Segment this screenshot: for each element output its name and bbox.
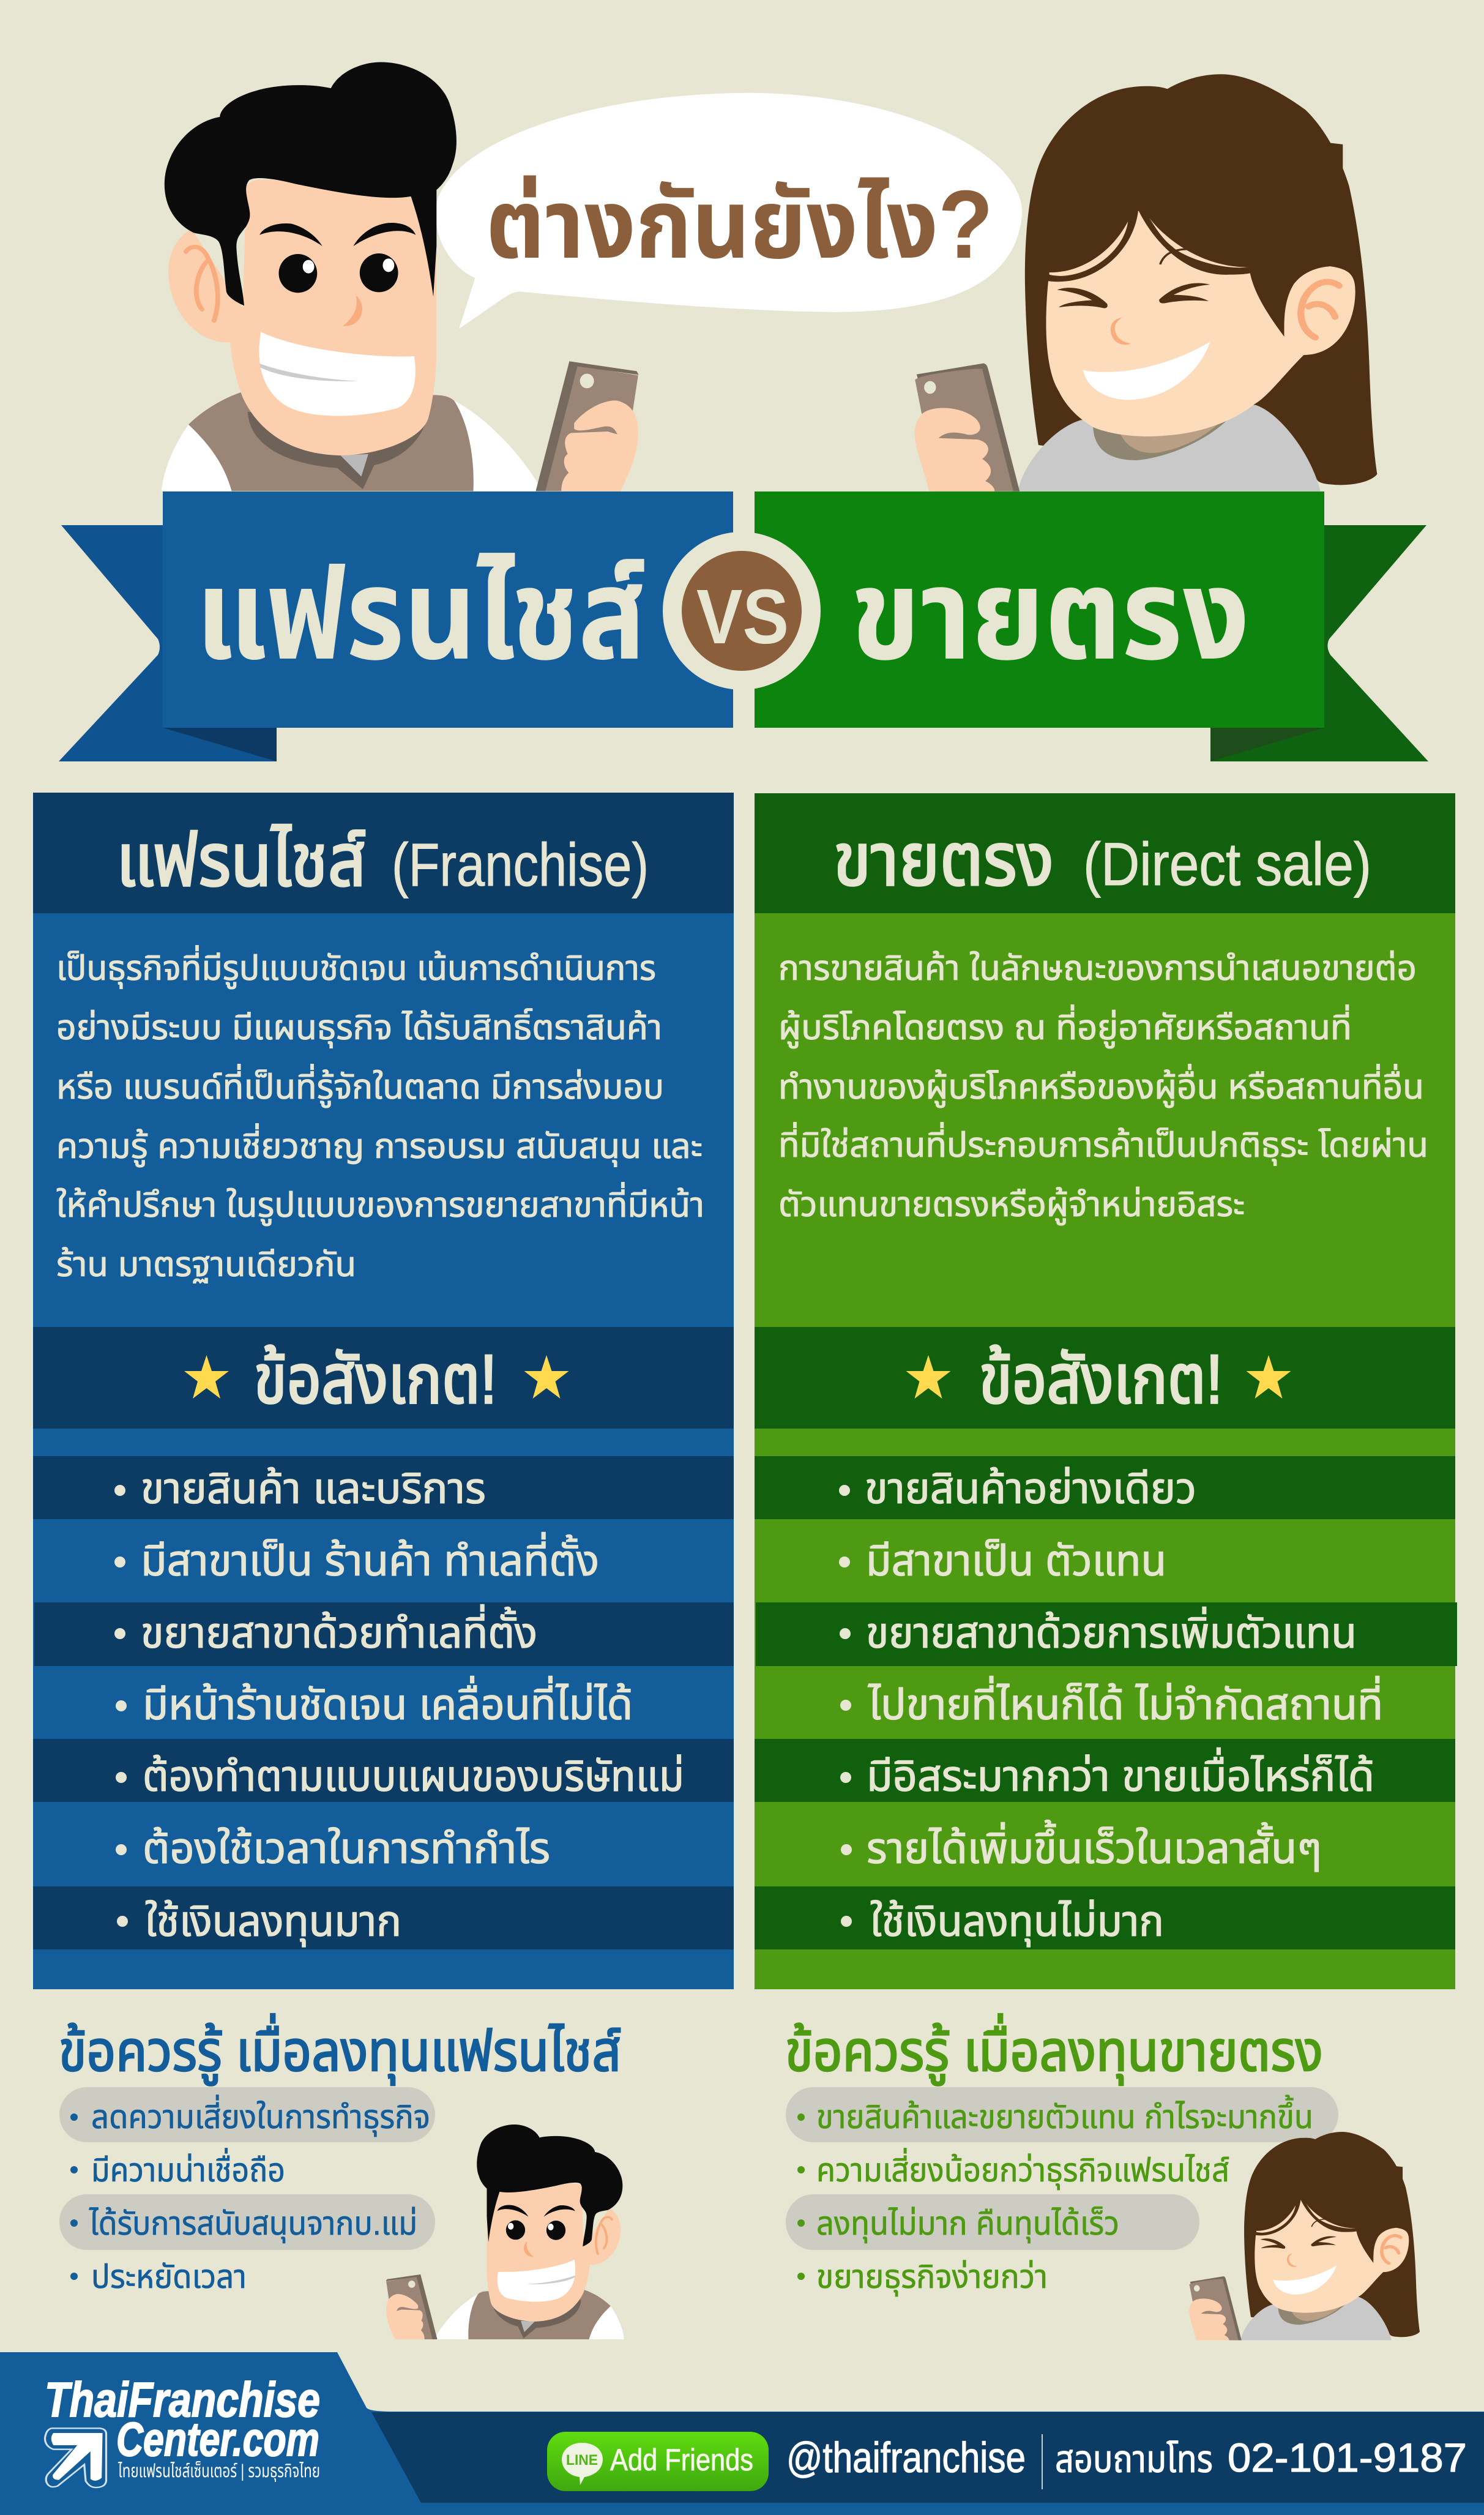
notes list: franchise (33, 1456, 734, 1949)
button: LINE add friends: LINE (566, 2452, 598, 2468)
bullets (70, 2113, 78, 2280)
list items: ลงทุนไม่มาก คืนทุนได้เร็ว (816, 2205, 1119, 2243)
list items (89, 2095, 430, 2295)
notes heading: direct sale: ข้อสังเกต! (979, 1341, 1223, 1418)
direct sale description text: ผู้บริโภคโดยตรง ณ ที่อยู่อาศัยหรือสถานที่ (778, 1004, 1352, 1048)
heading: franchise investing: ข้อควรรู้ เมื่อลงทุนแฟรนไชส์ (59, 2014, 621, 2085)
franchise description text (56, 945, 704, 1284)
button: LINE add friends (547, 2432, 769, 2491)
logo: ThaiFranchise Center: ไทยแฟรนไชส์เซ็นเตอร์ | รวมธุรกิจไทย (117, 2461, 320, 2482)
contact: line id and phone: สอบถามโทร (1055, 2438, 1213, 2481)
notes list: franchise: ขยายสาขาด้วยทำเลที่ตั้ง (141, 1604, 537, 1657)
banner ribbon tail: left (59, 525, 277, 761)
notes list: franchise: ใช้เงินลงทุนมาก (145, 1897, 401, 1947)
notes list: direct sale: ใช้เงินลงทุนไม่มาก (870, 1897, 1164, 1947)
notes list: direct sale: รายได้เพิ่มขึ้นเร็วในเวลาสั้นๆ (867, 1820, 1322, 1872)
franchise description text: ความรู้ ความเชี่ยวชาญ การอบรม สนับสนุน และ (56, 1123, 703, 1167)
panel heading: franchise: แฟรนไชส์ (116, 820, 366, 902)
illustration: small woman (1189, 2132, 1420, 2340)
direct sale description text: ตัวแทนขายตรงหรือผู้จำหน่ายอิสระ (778, 1185, 1245, 1225)
direct sale description text: การขายสินค้า ในลักษณะของการนำเสนอขายต่อ (778, 949, 1417, 987)
direct sale description text (778, 949, 1428, 1225)
illustration: man with phone (162, 62, 639, 491)
notes list: franchise: ต้องทำตามแบบแผนของบริษัทแม่ (143, 1752, 684, 1800)
banner: franchise title: แฟรนไชส์ (196, 544, 646, 686)
panel heading: franchise (33, 793, 734, 913)
notes list: franchise: ต้องใช้เวลาในการทำกำไร (143, 1825, 550, 1872)
list items (816, 2095, 1313, 2296)
list items: ขายสินค้าและขยายตัวแทน กำไรจะมากขึ้น (816, 2095, 1313, 2136)
speech bubble with question: ต่างกันยังไง? (486, 171, 993, 278)
panel: franchise (33, 793, 734, 1989)
section: things to know, direct sale (785, 2014, 1338, 2296)
logo icon: arrow (45, 2428, 106, 2487)
heading: direct sale investing: ข้อควรรู้ เมื่อลงทุนขายตรง (785, 2014, 1323, 2085)
notes list: franchise: มีสาขาเป็น ร้านค้า ทำเลที่ตั้ง (141, 1532, 599, 1585)
contact: line id and phone: 02-101-9187 (1228, 2435, 1467, 2480)
notes list: direct sale: มีสาขาเป็น ตัวแทน (866, 1537, 1166, 1585)
panel: direct sale (755, 793, 1457, 1989)
panel heading: direct sale (755, 793, 1455, 913)
notes heading: franchise: ข้อสังเกต! (254, 1341, 497, 1418)
notes list: direct sale: ไปขายที่ไหนก็ได้ ไม่จำกัดสถานที่ (868, 1676, 1383, 1728)
footer bar (0, 2352, 1484, 2515)
highlight pills (59, 2087, 435, 2250)
panel heading: franchise: (Franchise) (392, 831, 649, 899)
banner: direct sale title (755, 491, 1324, 728)
notes heading: direct sale (755, 1327, 1455, 1429)
bullets (797, 2113, 805, 2280)
list items: ความเสี่ยงน้อยกว่าธุรกิจแฟรนไชส์ (816, 2148, 1229, 2190)
notes list: direct sale: มีอิสระมากกว่า ขายเมื่อไหร่ก็ได้ (867, 1747, 1374, 1800)
list items: ได้รับการสนับสนุนจากบ.แม่ (89, 2205, 417, 2243)
direct sale description text: ที่มิใช่สถานที่ประกอบการค้าเป็นปกติธุระ โดยผ่าน (778, 1122, 1428, 1165)
direct sale description text: ทำงานของผู้บริโภคหรือของผู้อื่น หรือสถานที่อื่น (778, 1064, 1424, 1108)
list items: ประหยัดเวลา (91, 2259, 247, 2295)
banner ribbon tail: right (1210, 525, 1428, 761)
franchise description text: อย่างมีระบบ มีแผนธุรกิจ ได้รับสิทธิ์ตราสินค้า (56, 1008, 662, 1048)
notes heading: franchise (33, 1327, 734, 1429)
notes list: direct sale: ขายสินค้าอย่างเดียว (865, 1465, 1196, 1512)
button: LINE add friends: Add Friends (610, 2443, 753, 2477)
franchise description text: เป็นธุรกิจที่มีรูปแบบชัดเจน เน้นการดำเนินการ (56, 945, 656, 989)
notes list: franchise: ขายสินค้า และบริการ (141, 1465, 486, 1512)
notes list: franchise: มีหน้าร้านชัดเจน เคลื่อนที่ไม่ได้ (143, 1676, 633, 1728)
section: things to know, franchise (59, 2014, 621, 2295)
logo: ThaiFranchise Center: Center.com (116, 2412, 319, 2466)
contact: line id and phone: @thaifranchise (786, 2434, 1026, 2481)
banner: franchise title (163, 491, 733, 728)
franchise description text: หรือ แบรนด์ที่เป็นที่รู้จักในตลาด มีการส่งมอบ (56, 1064, 664, 1108)
logo: ThaiFranchise Center: ThaiFranchise (45, 2372, 320, 2427)
notes list: direct sale: ขยายสาขาด้วยการเพิ่มตัวแทน (866, 1607, 1357, 1657)
speech bubble with question (435, 93, 1022, 329)
panel heading: direct sale: ขายตรง (833, 819, 1054, 901)
VS badge: VS (696, 574, 789, 660)
franchise description text: ร้าน มาตรฐานเดียวกัน (56, 1245, 356, 1284)
logo: ThaiFranchise Center (45, 2372, 320, 2487)
contact: line id and phone (786, 2434, 1467, 2489)
panel heading: direct sale: (Direct sale) (1083, 830, 1371, 898)
banner: direct sale title: ขายตรง (851, 544, 1250, 686)
illustration: woman with phone (914, 74, 1377, 491)
list items: ลดความเสี่ยงในการทำธุรกิจ (91, 2095, 430, 2137)
VS badge (663, 532, 821, 690)
highlight pills (786, 2087, 1338, 2250)
franchise description text: ให้คำปรึกษา ในรูปแบบของการขยายสาขาที่มีหน้า (56, 1182, 704, 1226)
list items: ขยายธุรกิจง่ายกว่า (816, 2259, 1048, 2296)
notes list: direct sale (755, 1456, 1457, 1949)
list items: มีความน่าเชื่อถือ (91, 2148, 285, 2189)
illustration: small man (386, 2124, 624, 2339)
